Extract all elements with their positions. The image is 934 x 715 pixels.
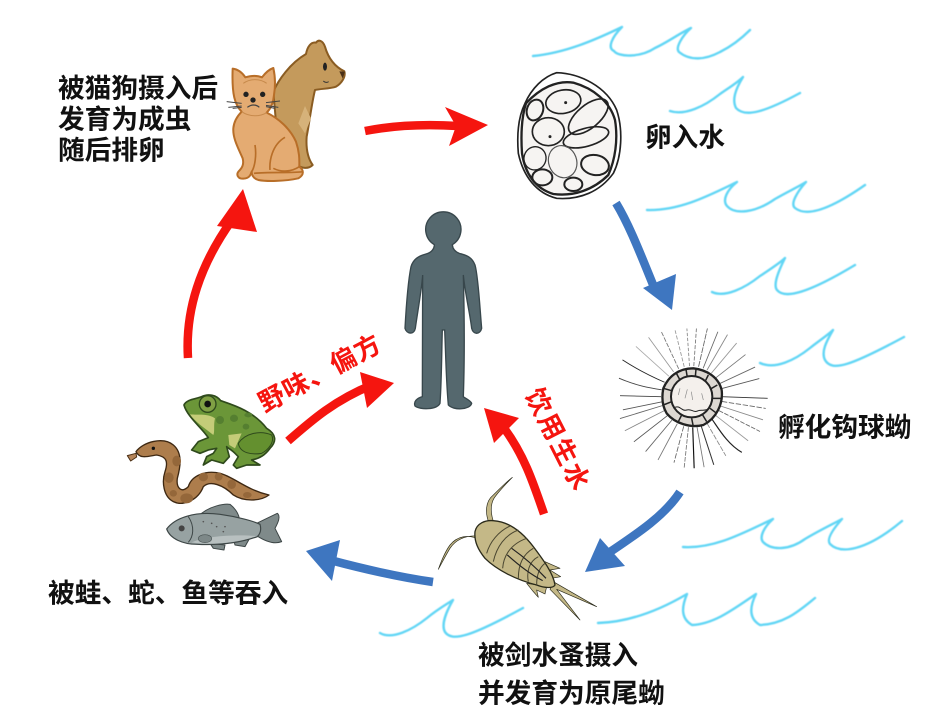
arrow: cat to egg xyxy=(365,107,488,146)
icon: hatched larva xyxy=(618,328,768,468)
icon: egg xyxy=(518,73,621,199)
icon: snake xyxy=(127,441,269,503)
larva shell xyxy=(662,368,722,427)
water waves xyxy=(380,27,904,637)
larva radiating cilia xyxy=(618,328,768,468)
antennae and tail spines xyxy=(438,477,597,620)
arrow: copepod to person (drinking raw water) xyxy=(484,408,544,514)
dog xyxy=(273,41,345,168)
icon: frog xyxy=(184,395,275,468)
arrow: copepod to snake frog fish xyxy=(306,540,433,582)
label: egg in water: 卵入水 xyxy=(645,122,725,152)
heading: cat and dog stage: 发育为成虫 xyxy=(58,104,191,134)
icon: cat and dog xyxy=(227,41,345,181)
label: game and folk remedies: 野味、偏方 xyxy=(253,328,387,418)
label: copepod stage: 并发育为原尾蚴 xyxy=(478,678,665,708)
heading: cat and dog stage: 被猫狗摄入后 xyxy=(58,74,218,104)
figure: person xyxy=(405,212,482,409)
arrow: larva to copepod xyxy=(585,492,680,572)
heading: cat and dog stage xyxy=(58,74,218,166)
label: copepod stage: 被剑水蚤摄入 xyxy=(478,640,638,670)
icon: fish xyxy=(167,504,282,550)
heading: cat and dog stage: 随后排卵 xyxy=(58,136,165,166)
arrow: frog to person (game and folk remedies) xyxy=(288,372,394,441)
copepod body xyxy=(475,521,555,587)
label: copepod stage xyxy=(478,640,665,708)
label: swallowed stage: 被蛙、蛇、鱼等吞入 xyxy=(48,578,288,608)
icon: copepod xyxy=(438,477,597,620)
label: drinking raw water: 饮用生水 xyxy=(519,383,597,497)
cat xyxy=(232,68,303,181)
label: hatched larva: 孵化钩球蚴 xyxy=(778,412,911,442)
arrow: frog to cat xyxy=(188,189,257,358)
arrow: egg to larva xyxy=(616,203,676,310)
